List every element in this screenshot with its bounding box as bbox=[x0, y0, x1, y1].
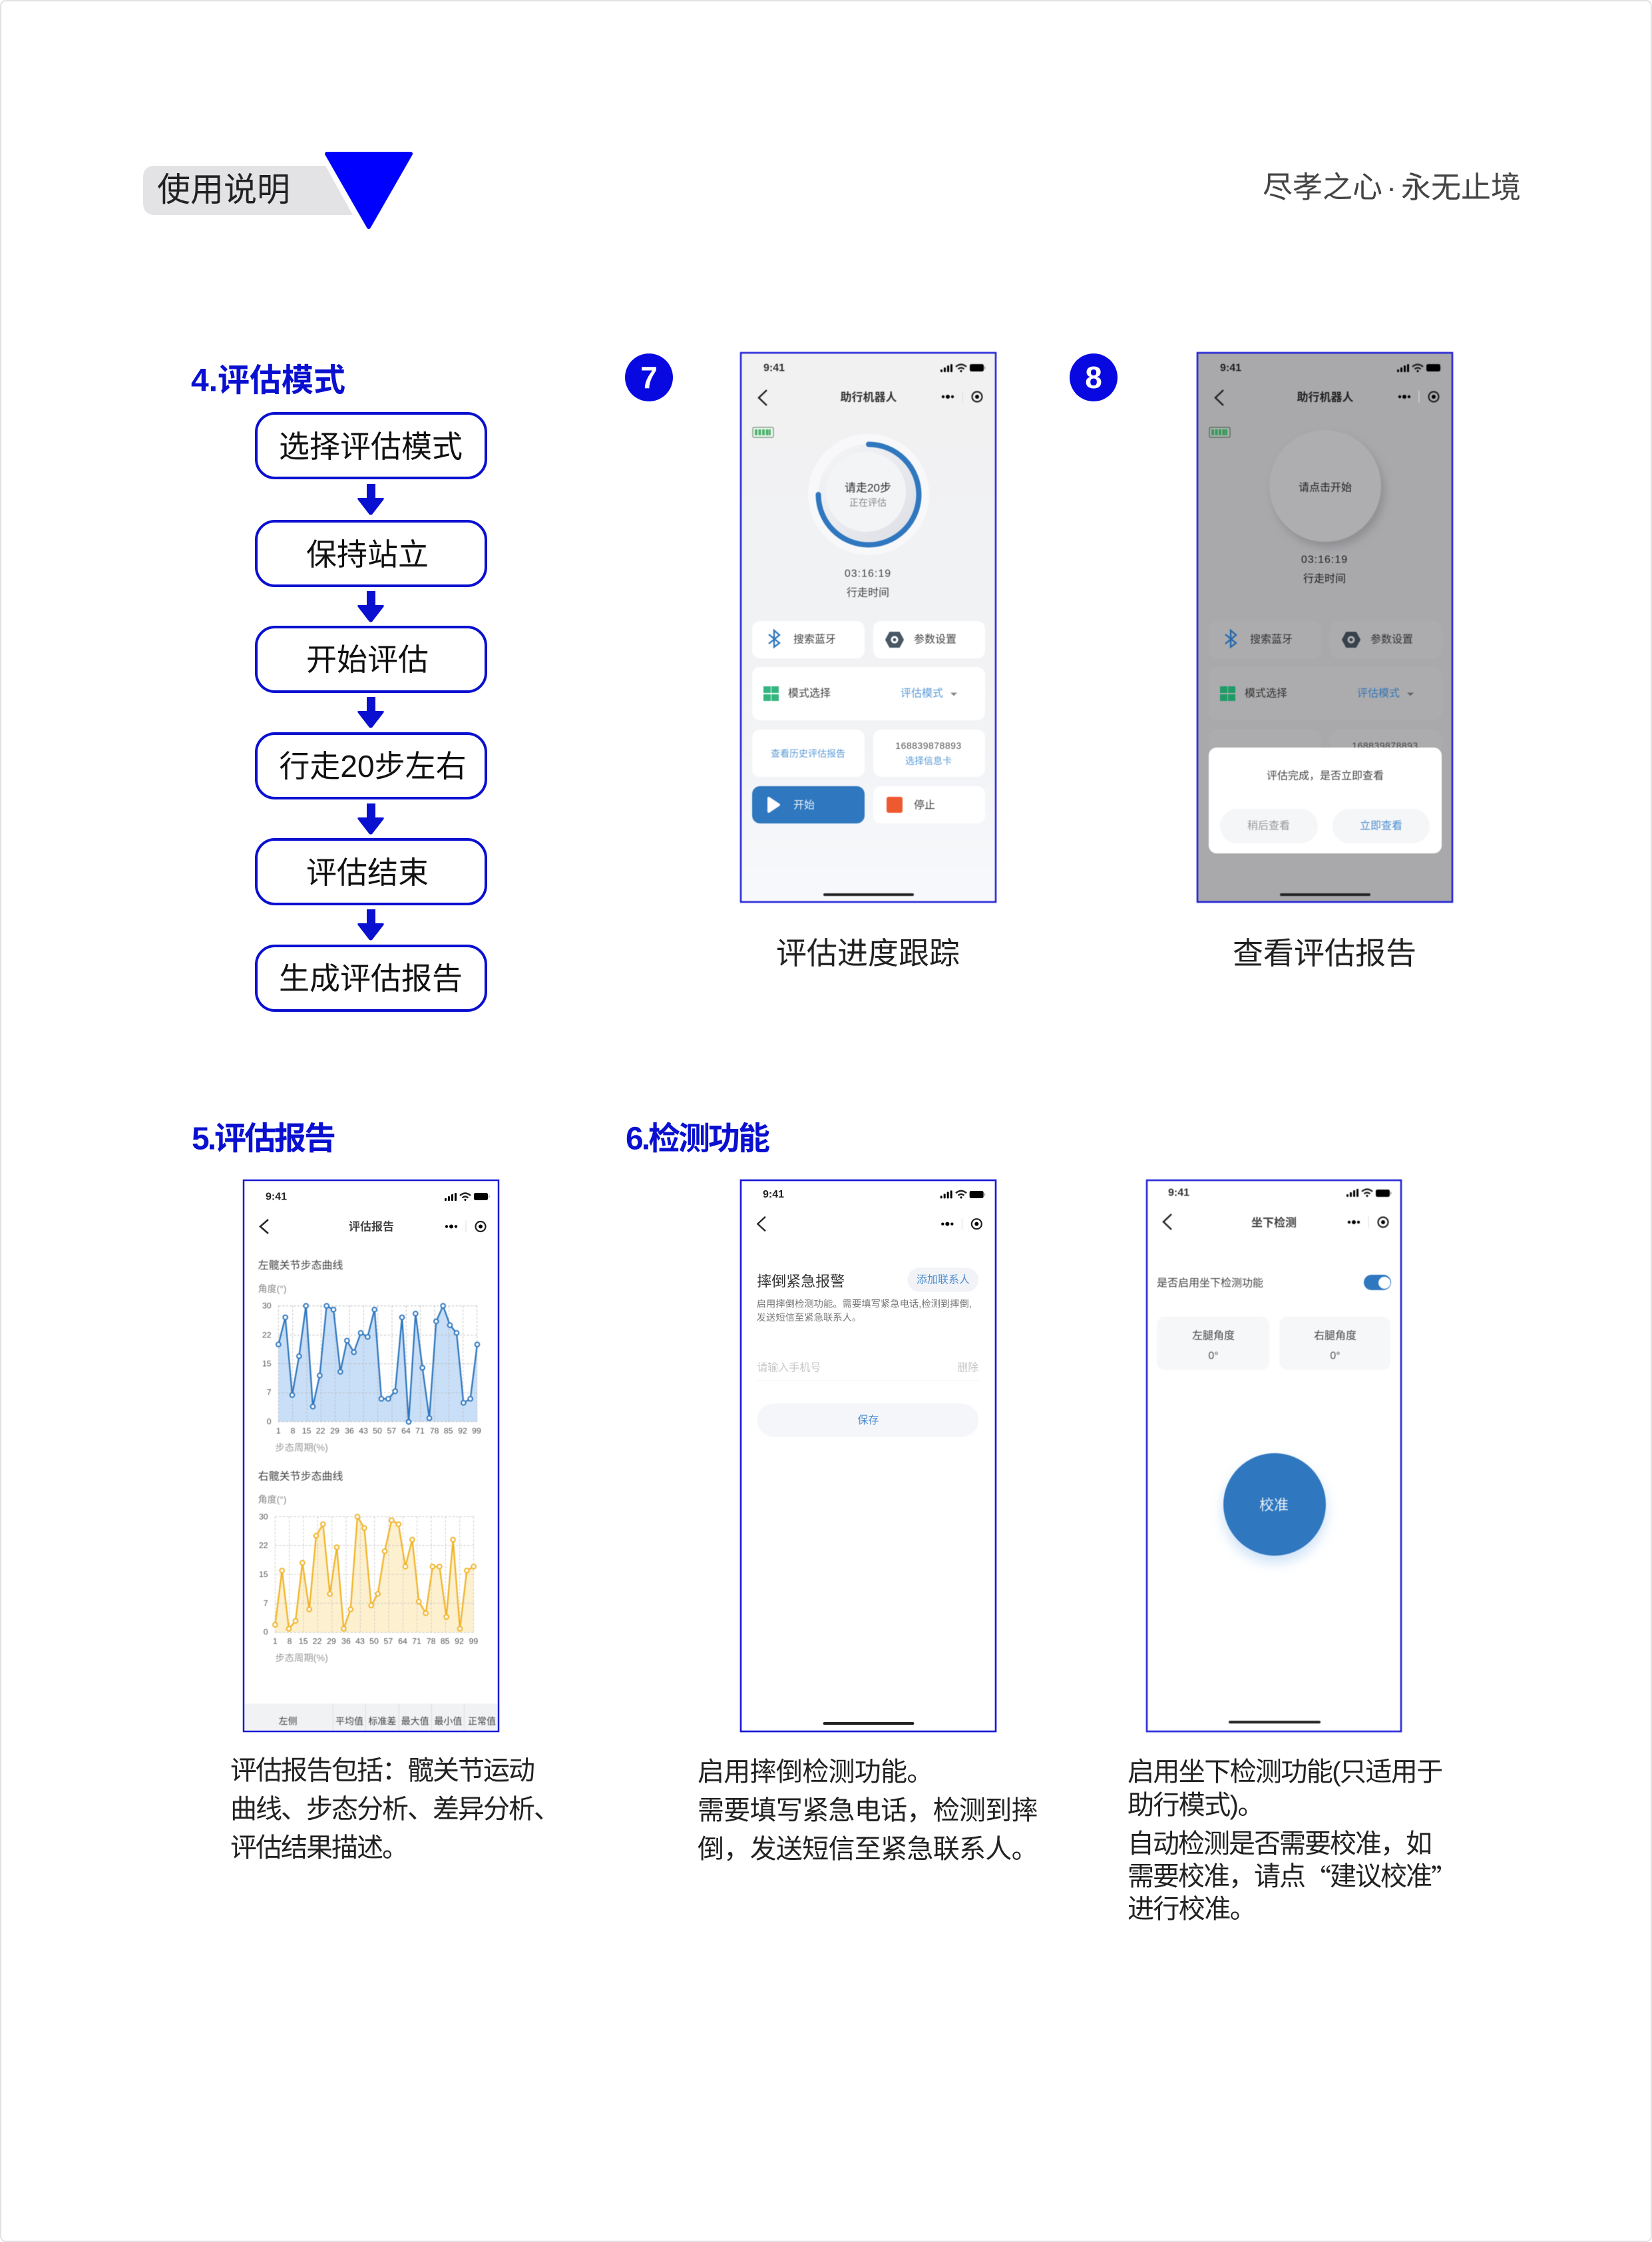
navigation bar bbox=[757, 1217, 982, 1231]
text: fall detection description bbox=[698, 1757, 1038, 1864]
chart: right hip: 22 bbox=[259, 1541, 268, 1550]
card: left leg angle bbox=[1157, 1317, 1269, 1370]
start button bbox=[752, 786, 865, 823]
add contact button bbox=[907, 1267, 978, 1292]
dialog bbox=[1209, 748, 1442, 853]
chart: right hip: 8 bbox=[288, 1637, 292, 1646]
step: report bbox=[256, 946, 486, 1010]
chart: right hip: 85 bbox=[441, 1637, 450, 1646]
battery indicator bbox=[1209, 427, 1230, 437]
phone input bbox=[757, 1361, 980, 1381]
text: report description bbox=[230, 1756, 559, 1863]
chart: right hip: 43 bbox=[355, 1637, 365, 1646]
chart: left hip: 步态周期(%) bbox=[275, 1443, 328, 1454]
step: walk bbox=[256, 734, 486, 798]
status bar bbox=[763, 1189, 985, 1200]
table header: 最小值 bbox=[434, 1716, 462, 1727]
report phone frame bbox=[244, 1180, 499, 1731]
toggle row bbox=[1157, 1275, 1391, 1290]
chart: right hip: 64 bbox=[398, 1637, 407, 1646]
card: settings: 参数设置 bbox=[1370, 634, 1413, 646]
button: view later: 稍后查看 bbox=[1247, 820, 1290, 832]
button: view now bbox=[1333, 809, 1430, 843]
card: search bluetooth: 搜索蓝牙 bbox=[793, 634, 836, 646]
caption: progress tracking: 评估进度跟踪 bbox=[776, 936, 960, 971]
chart: right hip: 1 bbox=[273, 1637, 278, 1646]
chart: left hip: 78 bbox=[430, 1426, 439, 1435]
badge 8: 8 bbox=[1085, 360, 1102, 395]
card: mode select: 模式选择 bbox=[788, 687, 831, 699]
card: settings bbox=[873, 621, 985, 658]
home indicator bbox=[1280, 893, 1370, 896]
phone frame bbox=[741, 1180, 996, 1731]
chart: left hip: 29 bbox=[330, 1426, 339, 1435]
text: sit detection description: 自动检测是否需要校准，如 bbox=[1128, 1829, 1431, 1859]
chart: right hip: 71 bbox=[412, 1637, 421, 1646]
slogan: 尽孝之心·永无止境 bbox=[1263, 170, 1521, 204]
phone: sit detection bbox=[1147, 1180, 1401, 1731]
card: report history: 查看历史评估报告 bbox=[771, 748, 845, 759]
card: info card bbox=[873, 730, 985, 777]
text: sit detection description: 启用坐下检测功能(只适用于 bbox=[1128, 1757, 1442, 1787]
card: mode select: 模式选择 bbox=[1245, 687, 1287, 699]
partly hidden cards: 168839878893 bbox=[1352, 740, 1418, 751]
chart: left hip: 57 bbox=[387, 1426, 396, 1435]
card: info card: 选择信息卡 bbox=[905, 756, 952, 766]
chart: left hip: 36 bbox=[345, 1426, 354, 1435]
button: view later bbox=[1220, 809, 1318, 843]
description: 启用摔倒检测功能。需要填写紧急电话,检测到摔倒, bbox=[757, 1298, 972, 1309]
status bar: 9:41 bbox=[1220, 362, 1241, 374]
status bar: 9:41 bbox=[266, 1192, 287, 1202]
text: sit detection description: 助行模式)。 bbox=[1128, 1791, 1263, 1820]
dialog: 评估完成，是否立即查看 bbox=[1267, 770, 1384, 782]
text: sit detection description: 进行校准。 bbox=[1128, 1895, 1255, 1924]
text: fall detection description: 启用摔倒检测功能。 bbox=[698, 1757, 933, 1787]
chart: right hip: 右髋关节步态曲线 bbox=[258, 1470, 343, 1482]
phone: evaluation progress bbox=[741, 353, 996, 902]
start disc bbox=[1269, 430, 1384, 547]
table header: 最大值 bbox=[401, 1716, 429, 1727]
progress ring: 正在评估 bbox=[849, 497, 887, 508]
chart: left hip: 22 bbox=[262, 1331, 272, 1340]
chart: right hip: 29 bbox=[327, 1637, 336, 1646]
chart: left hip: 85 bbox=[444, 1426, 453, 1435]
card: mode select: 评估模式 bbox=[901, 687, 943, 699]
timer bbox=[1301, 554, 1348, 584]
card: left leg angle: 左腿角度 bbox=[1192, 1330, 1235, 1342]
step: finish bbox=[256, 839, 486, 904]
arrow 1 bbox=[357, 484, 384, 515]
step: stand: 保持站立 bbox=[306, 537, 429, 572]
card: settings bbox=[1330, 621, 1442, 658]
step: select mode bbox=[256, 413, 486, 478]
phone frame bbox=[1197, 353, 1452, 902]
chart: right hip: 92 bbox=[455, 1637, 464, 1646]
heading: 4 evaluation mode: 4.评估模式 bbox=[191, 363, 345, 398]
text: report description: 评估报告包括：髋关节运动 bbox=[230, 1756, 534, 1785]
timer: 行走时间 bbox=[847, 587, 889, 599]
text: fall detection description: 倒，发送短信至紧急联系人。 bbox=[698, 1835, 1038, 1864]
navigation bar bbox=[759, 390, 982, 405]
phone frame bbox=[741, 353, 996, 902]
chart: right hip: 99 bbox=[469, 1637, 478, 1646]
phone: evaluation report bbox=[244, 1180, 499, 1731]
navigation bar: 评估报告 bbox=[349, 1221, 394, 1233]
navigation bar bbox=[1215, 390, 1439, 405]
chart: right hip: 15 bbox=[299, 1637, 308, 1646]
chart: right hip: 15 bbox=[259, 1570, 268, 1579]
card: search bluetooth bbox=[752, 621, 865, 658]
navigation bar: 坐下检测 bbox=[1251, 1216, 1297, 1229]
home indicator bbox=[823, 1722, 914, 1725]
timer: 03:16:19 bbox=[1301, 554, 1348, 566]
status bar bbox=[1168, 1188, 1391, 1198]
step: start: 开始评估 bbox=[306, 642, 429, 677]
chart: right hip: 7 bbox=[264, 1598, 268, 1608]
phone: fall alarm bbox=[741, 1180, 996, 1731]
step: finish: 评估结束 bbox=[306, 855, 429, 890]
calibrate button bbox=[1223, 1453, 1327, 1563]
chart: left hip: 0 bbox=[267, 1417, 272, 1427]
arrow 2 bbox=[357, 591, 384, 622]
step: start bbox=[256, 627, 486, 692]
table header: 左侧 bbox=[279, 1716, 298, 1727]
chart: left hip: 30 bbox=[262, 1301, 272, 1311]
timer bbox=[845, 568, 891, 599]
description bbox=[757, 1298, 972, 1323]
chart: right hip: 78 bbox=[427, 1637, 436, 1646]
chart: left hip: 左髋关节步态曲线 bbox=[258, 1259, 343, 1271]
stop button bbox=[873, 786, 985, 823]
battery indicator bbox=[753, 427, 773, 437]
chart: right hip: 57 bbox=[383, 1637, 393, 1646]
home indicator bbox=[1229, 1721, 1321, 1723]
step: report: 生成评估报告 bbox=[279, 961, 463, 996]
chart: left hip: 1 bbox=[276, 1426, 281, 1435]
phone frame bbox=[1147, 1180, 1401, 1731]
chart: left hip: 15 bbox=[262, 1359, 272, 1369]
header tag: usage instructions: 使用说明 bbox=[157, 171, 290, 208]
chart: right hip: 0 bbox=[264, 1628, 268, 1637]
partly hidden cards bbox=[1209, 730, 1442, 756]
chart: right hip: 30 bbox=[259, 1512, 268, 1521]
table header bbox=[244, 1703, 497, 1730]
text: sit detection description: 需要校准，请点“建议校准” bbox=[1128, 1857, 1456, 1896]
heading: 5 evaluation report: 5.评估报告 bbox=[192, 1121, 335, 1157]
navigation bar: 助行机器人 bbox=[1297, 391, 1354, 403]
chart: left hip: 8 bbox=[291, 1426, 296, 1435]
chart: left hip: 99 bbox=[472, 1426, 481, 1435]
chart: left hip: 92 bbox=[458, 1426, 467, 1435]
arrow 5 bbox=[357, 909, 384, 940]
chart: right hip: 22 bbox=[313, 1637, 322, 1646]
text: fall detection description: 需要填写紧急电话，检测到摔 bbox=[698, 1796, 1038, 1825]
navigation bar: 助行机器人 bbox=[840, 391, 897, 403]
timer: 行走时间 bbox=[1303, 572, 1346, 584]
table header: 正常值 bbox=[468, 1716, 496, 1727]
table header: 平均值 bbox=[335, 1716, 363, 1727]
phone input: 删除 bbox=[958, 1361, 978, 1373]
chart: left hip bbox=[258, 1259, 481, 1454]
chart: left hip: 64 bbox=[401, 1426, 411, 1435]
step: stand bbox=[256, 521, 486, 586]
badge 8 bbox=[1070, 353, 1118, 401]
text: sit detection description bbox=[1128, 1757, 1456, 1924]
status bar bbox=[763, 362, 985, 374]
add contact button: 添加联系人 bbox=[917, 1273, 970, 1285]
card: search bluetooth: 搜索蓝牙 bbox=[1250, 634, 1293, 646]
status bar: 9:41 bbox=[763, 1189, 784, 1200]
start disc: 请点击开始 bbox=[1299, 482, 1352, 494]
card: info card: 168839878893 bbox=[895, 740, 962, 751]
card: report history bbox=[752, 730, 865, 777]
badge 7: 7 bbox=[640, 360, 658, 395]
text: report description: 评估结果描述。 bbox=[230, 1833, 407, 1863]
caption: view report: 查看评估报告 bbox=[1233, 936, 1416, 971]
navigation bar bbox=[1163, 1214, 1388, 1230]
card: mode select bbox=[1209, 667, 1442, 720]
arrow 4 bbox=[357, 803, 384, 835]
chart: right hip: 50 bbox=[369, 1637, 379, 1646]
alarm title: 摔倒紧急报警 bbox=[757, 1273, 845, 1289]
description: 发送短信至紧急联系人。 bbox=[757, 1312, 861, 1323]
save button bbox=[757, 1403, 978, 1437]
chart: left hip: 22 bbox=[316, 1426, 325, 1435]
status bar: 9:41 bbox=[763, 362, 785, 374]
table header: 标准差 bbox=[368, 1716, 396, 1727]
card: search bluetooth bbox=[1209, 621, 1321, 658]
stop button: 停止 bbox=[914, 799, 935, 811]
step: select mode: 选择评估模式 bbox=[279, 429, 463, 464]
button: view now: 立即查看 bbox=[1360, 820, 1402, 832]
flow chart: evaluation steps bbox=[256, 413, 486, 1010]
card: settings: 参数设置 bbox=[914, 634, 956, 646]
chart: left hip: 43 bbox=[359, 1426, 368, 1435]
chart: left hip: 7 bbox=[267, 1388, 272, 1397]
card: left leg angle: 0° bbox=[1208, 1350, 1219, 1362]
badge 7 bbox=[625, 353, 673, 401]
navigation bar bbox=[260, 1220, 486, 1233]
calibrate button: 校准 bbox=[1259, 1496, 1289, 1514]
chart: right hip: 步态周期(%) bbox=[275, 1653, 328, 1664]
progress ring bbox=[808, 434, 929, 555]
phone input: 请输入手机号 bbox=[757, 1361, 821, 1373]
save button: 保存 bbox=[857, 1414, 879, 1426]
card: right leg angle: 0° bbox=[1330, 1350, 1341, 1362]
card: right leg angle: 右腿角度 bbox=[1314, 1330, 1356, 1342]
status bar: 9:41 bbox=[1168, 1188, 1189, 1198]
status bar bbox=[266, 1192, 490, 1202]
card: right leg angle bbox=[1279, 1317, 1390, 1370]
progress ring: 请走20步 bbox=[845, 482, 891, 494]
chart: left hip: 71 bbox=[415, 1426, 425, 1435]
chart: left hip: 50 bbox=[373, 1426, 382, 1435]
chart: right hip: 36 bbox=[341, 1637, 351, 1646]
toggle row: 是否启用坐下检测功能 bbox=[1157, 1277, 1263, 1289]
step: walk: 行走20步左右 bbox=[279, 749, 467, 784]
card: mode select: 评估模式 bbox=[1357, 687, 1400, 699]
header tag: usage instructions bbox=[143, 154, 411, 227]
timer: 03:16:19 bbox=[845, 568, 891, 579]
arrow 3 bbox=[357, 697, 384, 728]
chart: left hip: 15 bbox=[302, 1426, 311, 1435]
phone: view evaluation report dialog bbox=[1197, 353, 1452, 902]
chart: right hip bbox=[244, 1470, 497, 1730]
chart: right hip: 角度(°) bbox=[258, 1494, 287, 1504]
status bar bbox=[1220, 362, 1442, 374]
chart: left hip: 角度(°) bbox=[258, 1283, 287, 1294]
text: report description: 曲线、步态分析、差异分析、 bbox=[230, 1795, 559, 1824]
home indicator bbox=[823, 893, 914, 896]
start button: 开始 bbox=[793, 799, 815, 811]
heading: 6 detection: 6.检测功能 bbox=[626, 1121, 769, 1157]
card: mode select bbox=[752, 667, 985, 720]
